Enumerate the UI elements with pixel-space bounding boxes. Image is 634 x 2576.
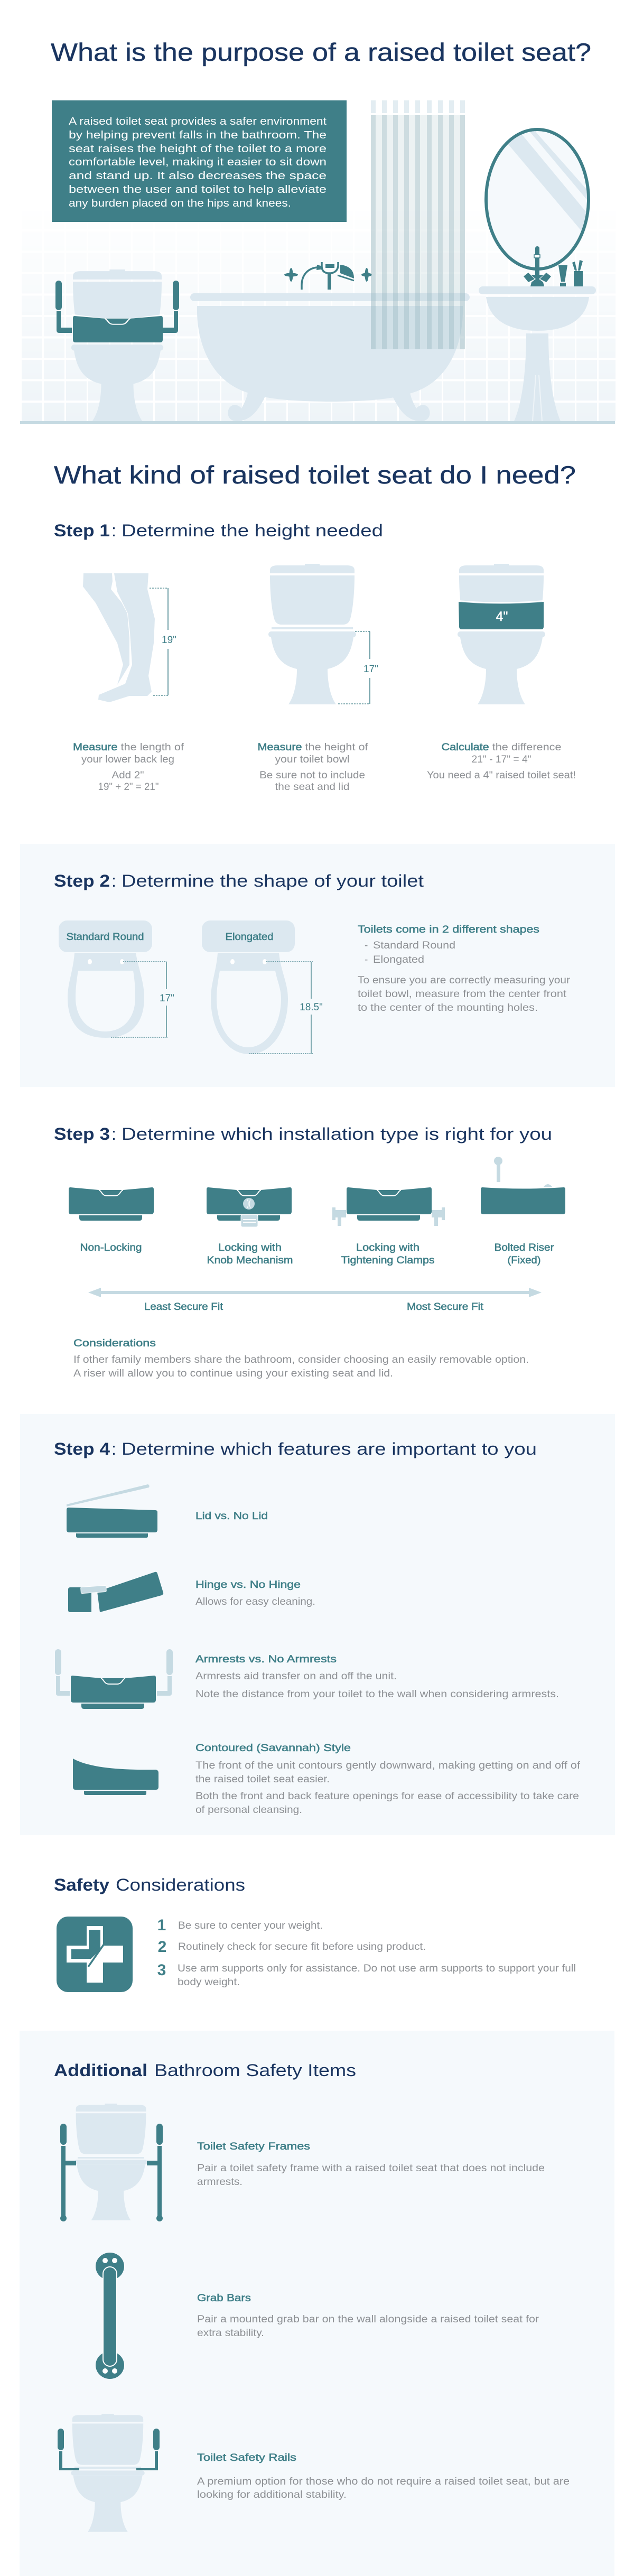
shapes description: -: [365, 954, 368, 965]
shapes description: Toilets come in 2 different shapes: [358, 924, 539, 935]
contoured text: Both the front and back feature openings for ease of accessibility to take care: [195, 1791, 579, 1802]
step 1 heading: :: [111, 521, 116, 540]
standard round toilet seat: Standard Round: [67, 932, 144, 943]
arrow: security scale: Most Secure Fit: [407, 1301, 484, 1313]
toilet with 4 inch seat: 4": [496, 609, 508, 624]
toilet frames text: armrests.: [197, 2177, 243, 2188]
armrest text: [195, 1654, 559, 1700]
contoured text: Contoured (Savannah) Style: [195, 1743, 351, 1754]
grab bars text: Pair a mounted grab bar on the wall alongside a raised toilet seat for: [197, 2314, 539, 2325]
step 3 heading: :: [111, 1124, 116, 1143]
step 1 column 3 text: You need a 4" raised toilet seat!: [427, 770, 576, 781]
safety list: Be sure to center your weight.: [178, 1920, 323, 1931]
grab bars text: extra stability.: [197, 2328, 264, 2339]
step 1 column 1 text: Measure the length of: [73, 742, 184, 753]
non-locking seat: Non-Locking: [80, 1242, 142, 1253]
heading: what kind: What kind of raised toilet seat do I need?: [54, 461, 576, 489]
hinge text: Allows for easy cleaning.: [195, 1596, 315, 1607]
intro text box: and stand up. It also decreases the space: [69, 170, 327, 182]
safety list: body weight.: [178, 1977, 240, 1988]
tightening clamps seat: [332, 1187, 445, 1266]
icon: toilet safety frame: [60, 2104, 163, 2221]
step 1 heading: Determine the height needed: [122, 521, 383, 540]
step 2 heading: Determine the shape of your toilet: [122, 871, 424, 890]
icon: armrest seat: [55, 1649, 173, 1709]
step 3 heading: Step 3: [54, 1124, 110, 1143]
safety heading: [54, 1875, 245, 1894]
step 1 column 1 text: 19" + 2" = 21": [98, 782, 158, 793]
safety rails text: A premium option for those who do not require a raised toilet seat, but are: [197, 2476, 570, 2487]
mirror: [486, 127, 594, 269]
considerations: If other family members share the bathroom, consider choosing an easily removable option.: [73, 1354, 529, 1365]
leg measurement: [83, 573, 176, 702]
additional heading: Bathroom Safety Items: [154, 2061, 356, 2080]
standard round toilet seat: [59, 920, 174, 1038]
bath faucet: [284, 262, 372, 290]
safety rails text: [197, 2452, 570, 2500]
wall tiles: [22, 312, 616, 421]
step 1 column 1 text: Add 2": [112, 770, 144, 781]
elongated toilet seat: [202, 920, 323, 1054]
icon: toilet safety rails: [58, 2414, 160, 2532]
toilet frames text: Pair a toilet safety frame with a raised toilet seat that does not include: [197, 2163, 545, 2174]
shapes description: To ensure you are correctly measuring your: [358, 975, 571, 986]
shower curtain: [371, 100, 465, 349]
icon: medical cross: [57, 1917, 133, 1992]
sink: [479, 286, 596, 421]
icon: grab bar: [96, 2253, 124, 2379]
toilet frames text: [197, 2141, 545, 2188]
grab bars text: [197, 2293, 539, 2339]
armrest text: Armrests vs. No Armrests: [195, 1654, 337, 1665]
safety list: 3: [157, 1961, 166, 1979]
leg measurement: 19": [162, 635, 176, 646]
step 2 heading: [54, 871, 424, 890]
panel: additional safety items: [20, 2031, 614, 2576]
safety rails text: Toilet Safety Rails: [197, 2452, 296, 2463]
intro text box: [52, 100, 347, 222]
toilet with raised seat and armrests: [55, 269, 179, 421]
safety list: 2: [158, 1938, 166, 1956]
intro text box: A raised toilet seat provides a safer environment: [69, 116, 327, 127]
step 1 column 3 text: 21" - 17" = 4": [471, 754, 532, 765]
intro text box: comfortable level, making it easier to sit down: [69, 156, 327, 168]
step 1 heading: [54, 521, 383, 540]
elongated toilet seat: 18.5": [300, 1002, 323, 1013]
safety list: Routinely check for secure fit before using product.: [178, 1941, 426, 1952]
toilet bowl measurement: [268, 564, 378, 704]
knob mechanism seat: [207, 1187, 293, 1266]
armrest text: Armrests aid transfer on and off the unit.: [195, 1671, 397, 1682]
knob mechanism seat: Locking with: [218, 1242, 282, 1253]
bathtub: [190, 293, 470, 421]
intro text box: any burden placed on the hips and knees.: [69, 198, 291, 209]
grab bars text: Grab Bars: [197, 2293, 251, 2304]
intro text box: seat raises the height of the toilet to a more: [69, 143, 327, 155]
step 1 column 3 text: Calculate the difference: [442, 742, 561, 753]
floor line: [20, 421, 615, 424]
safety list: 1: [157, 1917, 166, 1934]
step 1 column 1 text: your lower back leg: [81, 754, 174, 765]
additional heading: [54, 2061, 356, 2080]
bolted riser: (Fixed): [507, 1255, 541, 1266]
icon: lid seat: [67, 1484, 157, 1538]
title: What is the purpose of a raised toilet seat?: [51, 38, 591, 66]
elongated toilet seat: Elongated: [225, 932, 274, 943]
additional heading: Additional: [54, 2061, 147, 2080]
contoured text: The front of the unit contours gently downward, making getting on and off of: [195, 1760, 581, 1771]
step 1 column 2 text: Measure the height of: [258, 742, 368, 753]
bathroom illustration: [20, 100, 616, 424]
considerations: [73, 1338, 529, 1379]
step 1 heading: Step 1: [54, 521, 110, 540]
arrow: security scale: [88, 1288, 542, 1313]
step 1 column 2 text: [258, 742, 368, 793]
toilet frames text: Toilet Safety Frames: [197, 2141, 310, 2152]
hinge text: [195, 1579, 315, 1607]
arrow: security scale: Least Secure Fit: [144, 1301, 223, 1313]
shapes description: Standard Round: [373, 940, 455, 951]
step 3 heading: Determine which installation type is right for you: [122, 1124, 552, 1143]
safety rails text: looking for additional stability.: [197, 2489, 347, 2500]
toilet bowl measurement: 17": [363, 664, 378, 675]
shapes description: toilet bowl, measure from the center front: [358, 989, 567, 1000]
panel: step 2: [20, 844, 615, 1087]
tightening clamps seat: Tightening Clamps: [341, 1255, 434, 1266]
knob mechanism seat: Knob Mechanism: [207, 1255, 293, 1266]
contoured text: the raised toilet seat easier.: [195, 1774, 330, 1785]
step 4 heading: Step 4: [54, 1439, 110, 1458]
shapes description: -: [365, 940, 368, 951]
icon: hinge seat: [68, 1572, 163, 1612]
tightening clamps seat: Locking with: [356, 1242, 419, 1253]
considerations: A riser will allow you to continue using your existing seat and lid.: [73, 1368, 393, 1379]
safety heading: Safety: [54, 1875, 109, 1894]
hinge text: Hinge vs. No Hinge: [195, 1579, 301, 1591]
bolted riser: Bolted Riser: [495, 1242, 554, 1253]
step 1 column 3 text: [427, 742, 576, 781]
safety heading: Considerations: [116, 1875, 245, 1894]
standard round toilet seat: 17": [160, 993, 174, 1004]
shapes description: Elongated: [373, 954, 424, 965]
intro text box: between the user and toilet to help alleviate: [69, 184, 327, 196]
icon: contoured seat: [73, 1759, 158, 1795]
step 2 heading: Step 2: [54, 871, 110, 890]
shapes description: [358, 924, 571, 1013]
considerations: Considerations: [73, 1338, 156, 1349]
step 2 heading: :: [111, 871, 116, 890]
step 4 heading: :: [111, 1439, 116, 1458]
armrest text: Note the distance from your toilet to the wall when considering armrests.: [195, 1689, 559, 1700]
safety list: [157, 1917, 576, 1988]
step 1 column 2 text: the seat and lid: [275, 782, 350, 793]
shapes description: to the center of the mounting holes.: [358, 1002, 538, 1013]
contoured text: [195, 1743, 581, 1816]
intro text box: by helping prevent falls in the bathroom. The: [69, 129, 327, 141]
safety list: Use arm supports only for assistance. Do not use arm supports to support your full: [178, 1963, 576, 1974]
step 1 column 1 text: [73, 742, 184, 793]
step 1 column 2 text: Be sure not to include: [259, 770, 365, 781]
step 4 heading: Determine which features are important to you: [122, 1439, 537, 1458]
panel: step 4: [20, 1414, 615, 1835]
bolted riser: [481, 1157, 565, 1266]
step 1 column 2 text: your toilet bowl: [275, 754, 350, 765]
contoured text: of personal cleansing.: [195, 1805, 302, 1816]
non-locking seat: [69, 1187, 154, 1253]
toilet with 4 inch seat: [458, 564, 545, 704]
lid text: Lid vs. No Lid: [195, 1511, 268, 1522]
sink faucet and cups: [524, 246, 583, 286]
